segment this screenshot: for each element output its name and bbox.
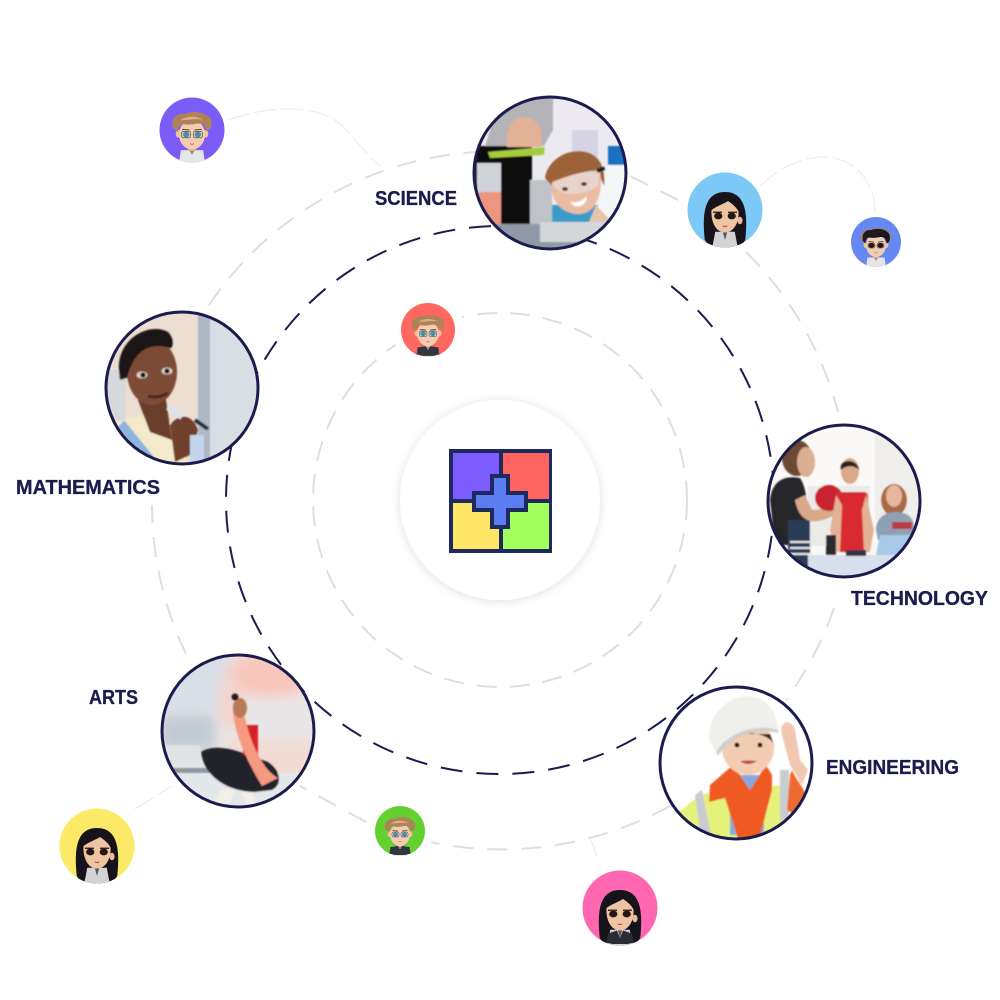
photo: technology [766,424,922,578]
photo: mathematics [104,310,260,466]
connector curves to avatars [135,109,875,856]
avatar: green boy [367,798,433,864]
photo: arts [160,654,316,808]
orbit: middle dark dashed ring [226,226,774,774]
label: arts: ARTS [89,687,138,709]
avatar: pink girl [582,870,658,946]
photo: science [472,96,628,250]
label: technology: TECHNOLOGY [851,588,989,610]
orbit: outer light dashed ring [152,152,838,849]
photo: engineering [655,685,820,845]
orbit: inner light dashed ring [313,313,687,687]
avatar: red boy [392,294,464,366]
avatar: yellow girl [60,808,134,884]
label: engineering: ENGINEERING [826,757,959,779]
label: mathematics: MATHEMATICS [16,477,160,499]
avatar: purple boy [160,98,224,162]
logo [449,449,552,553]
center badge [400,400,600,600]
avatar: light blue girl [688,172,762,248]
label: science: SCIENCE [375,188,457,210]
avatar: blue boy [851,217,901,267]
